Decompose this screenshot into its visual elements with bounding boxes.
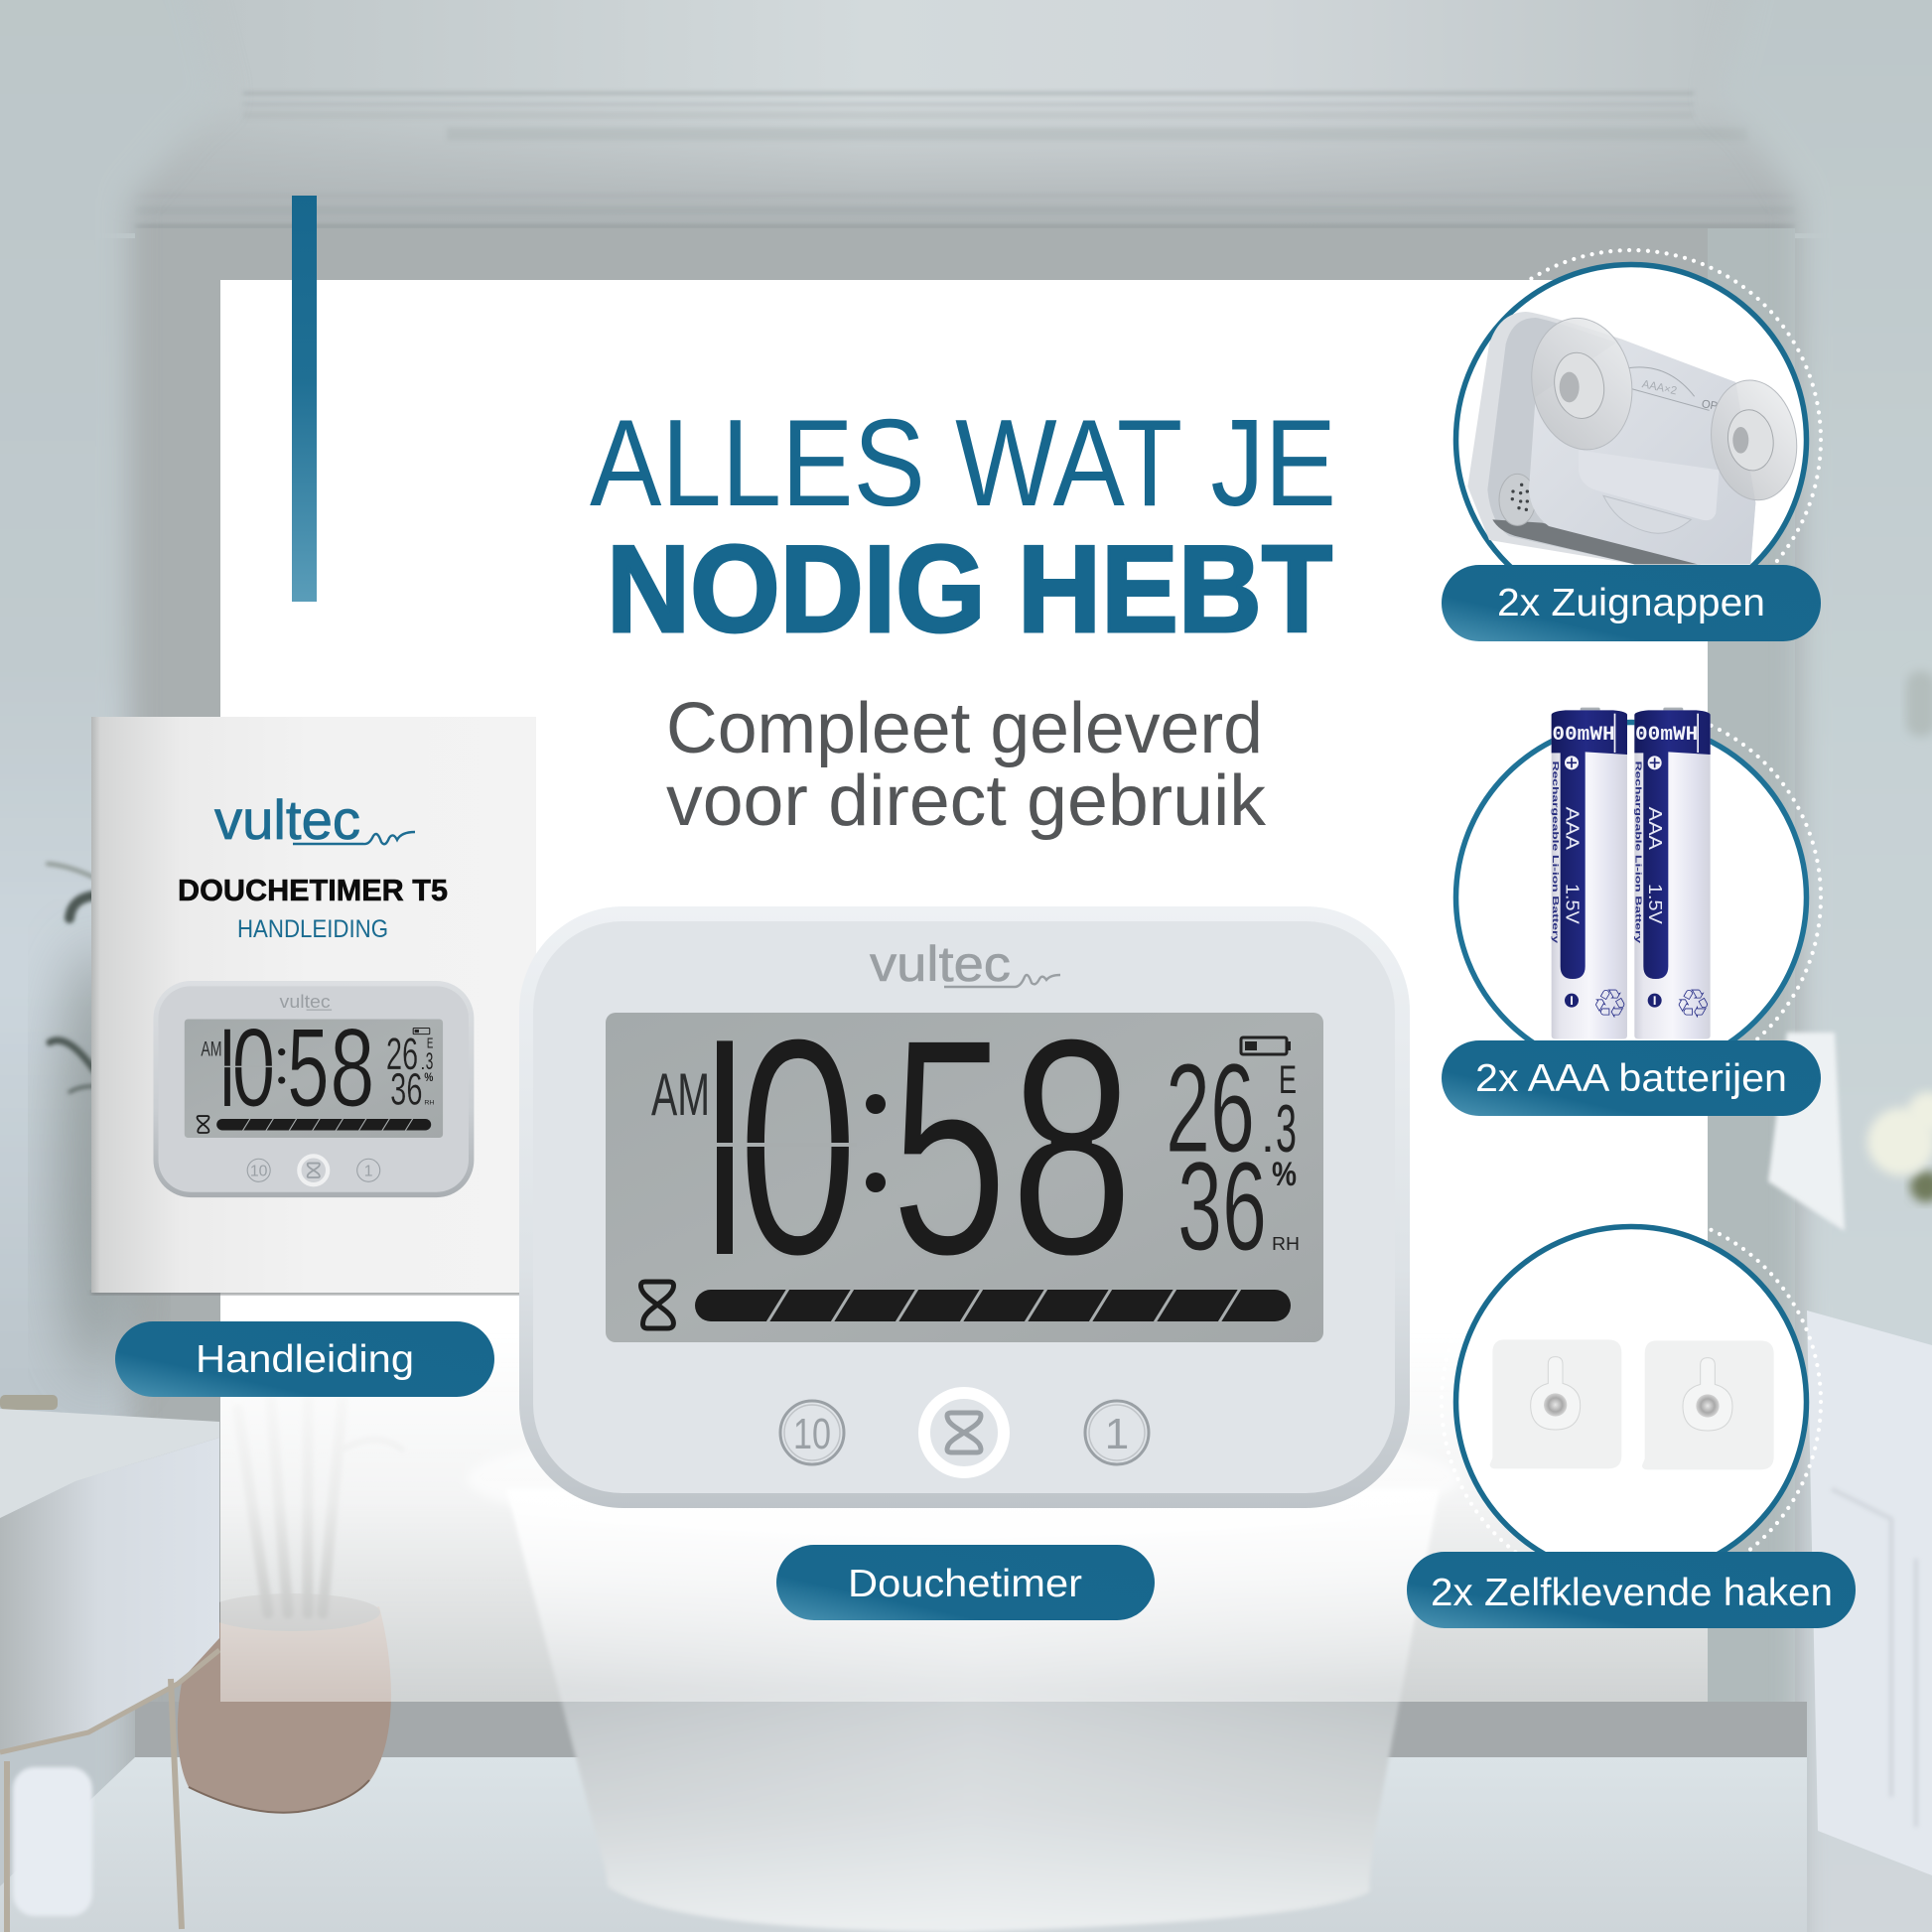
temperature and humidity readings: 26 — [1166, 1037, 1255, 1178]
mini timer on manual: vultec — [280, 992, 331, 1012]
icon: hook right — [1642, 1340, 1774, 1469]
icon: timer back with suction cups — [1467, 310, 1804, 564]
icon: AAA battery right: ♲ — [1675, 982, 1711, 1028]
mini timer on manual: AM — [201, 1036, 222, 1061]
AM indicator: AM — [651, 1061, 710, 1128]
label: Handleiding: Handleiding — [196, 1338, 414, 1381]
mini timer on manual: 10 — [250, 1164, 268, 1180]
icon: AAA battery left: 1.5V — [1562, 884, 1583, 924]
subtitle — [666, 689, 1267, 841]
icon: battery level — [1241, 1037, 1291, 1054]
temperature and humidity readings: 3 — [1276, 1091, 1297, 1167]
title: NODIG HEBT — [607, 521, 1332, 658]
bathtub — [506, 1489, 1440, 1932]
clock time: 8 — [1010, 974, 1134, 1320]
button: 1 minute: 1 — [1105, 1410, 1129, 1458]
timer logo — [870, 936, 1060, 992]
label: Zuignappen — [1442, 565, 1821, 641]
sink cabinet — [0, 1395, 219, 1932]
temperature and humidity readings: . — [1261, 1107, 1275, 1163]
icon: hook left — [1490, 1339, 1621, 1468]
icon: AAA battery left: 100mWH — [1540, 724, 1615, 747]
white panel — [220, 280, 1708, 1702]
mini timer on manual: % — [424, 1070, 433, 1084]
button: 1 minute — [1085, 1401, 1149, 1464]
LCD screen — [606, 1013, 1323, 1342]
subtitle: voor direct gebruik — [666, 761, 1267, 841]
manual booklet — [91, 717, 538, 1295]
label: AAA batterijen — [1442, 1040, 1821, 1116]
manual logo: vultec — [214, 788, 360, 851]
towel and flowers right — [1768, 671, 1932, 1231]
mini timer on manual — [153, 981, 474, 1197]
icon: AAA battery right: 100mWH — [1622, 724, 1698, 747]
bathroom floor — [0, 1757, 1807, 1932]
mini timer on manual: 1 — [364, 1164, 373, 1180]
temperature and humidity readings: % — [1272, 1156, 1297, 1193]
label: Zelfklevende haken: 2x Zelfklevende haken — [1431, 1572, 1833, 1614]
accent bar — [292, 196, 317, 602]
manual subtitle: HANDLEIDING — [237, 915, 388, 943]
icon: AAA battery right: 1.5V — [1645, 884, 1666, 924]
mini timer on manual: 3 — [426, 1048, 433, 1075]
timer logo: vultec — [870, 936, 1011, 992]
icon: AAA battery left — [1551, 707, 1627, 1039]
main shower timer — [519, 906, 1410, 1508]
icon: timer back with suction cups: OP — [1701, 398, 1719, 413]
mini timer on manual: 5 — [287, 1006, 330, 1131]
title — [590, 395, 1336, 658]
mini timer on manual: . — [420, 1053, 425, 1073]
potted plant — [178, 1390, 402, 1813]
icon: AAA battery right — [1634, 707, 1711, 1039]
timer body — [519, 906, 1410, 1508]
label: Zuignappen: 2x Zuignappen — [1497, 582, 1765, 624]
label: Douchetimer — [776, 1545, 1155, 1620]
button: 10 minutes: 10 — [793, 1410, 831, 1458]
mini timer on manual: 36 — [390, 1064, 423, 1115]
circle: adhesive hooks — [1442, 1212, 1821, 1591]
circle: batteries — [1453, 707, 1823, 1040]
label: Handleiding — [115, 1321, 494, 1397]
circle: suction cups — [1442, 250, 1821, 629]
label: Douchetimer: Douchetimer — [848, 1563, 1082, 1605]
label: Zelfklevende haken — [1407, 1552, 1856, 1628]
progress bar — [695, 1289, 1291, 1322]
button: hourglass — [924, 1393, 1004, 1472]
mini timer on manual: 1 — [197, 1005, 252, 1130]
icon: AAA battery left: Rechargeable Li-ion Battery — [1551, 761, 1560, 944]
temperature and humidity readings: 36 — [1177, 1136, 1267, 1277]
icon: AAA battery right: Rechargeable Li-ion Battery — [1634, 761, 1643, 944]
clock time: 1 — [639, 973, 794, 1319]
icon: AAA battery right: AAA — [1645, 807, 1666, 851]
clock time: 0 — [738, 974, 858, 1320]
icon: hourglass — [641, 1282, 673, 1328]
temperature and humidity readings — [1166, 1037, 1300, 1277]
icon: timer back with suction cups: AAA×2 — [1641, 378, 1678, 397]
title: ALLES WAT JE — [590, 395, 1336, 532]
temperature and humidity readings: RH — [1272, 1234, 1300, 1254]
mini timer on manual: RH — [424, 1100, 435, 1107]
mini timer on manual: 0 — [232, 1005, 275, 1130]
vanity cabinet right — [1807, 1311, 1932, 1875]
icon: AAA battery left: AAA — [1562, 807, 1583, 851]
temperature and humidity readings: E — [1279, 1058, 1297, 1102]
button: 10 minutes — [780, 1401, 844, 1464]
mini timer on manual: E — [427, 1036, 433, 1052]
mini timer on manual: 8 — [330, 1005, 374, 1130]
clock time: 5 — [891, 973, 1008, 1320]
plant leaves behind manual — [48, 864, 94, 1092]
label: AAA batterijen: 2x AAA batterijen — [1475, 1057, 1787, 1100]
mini timer on manual: 26 — [386, 1029, 418, 1079]
subtitle: Compleet geleverd — [666, 689, 1263, 768]
icon: AAA battery left: ♲ — [1592, 982, 1628, 1028]
clock time — [717, 1038, 1124, 1255]
manual title: DOUCHETIMER T5 — [178, 873, 448, 907]
